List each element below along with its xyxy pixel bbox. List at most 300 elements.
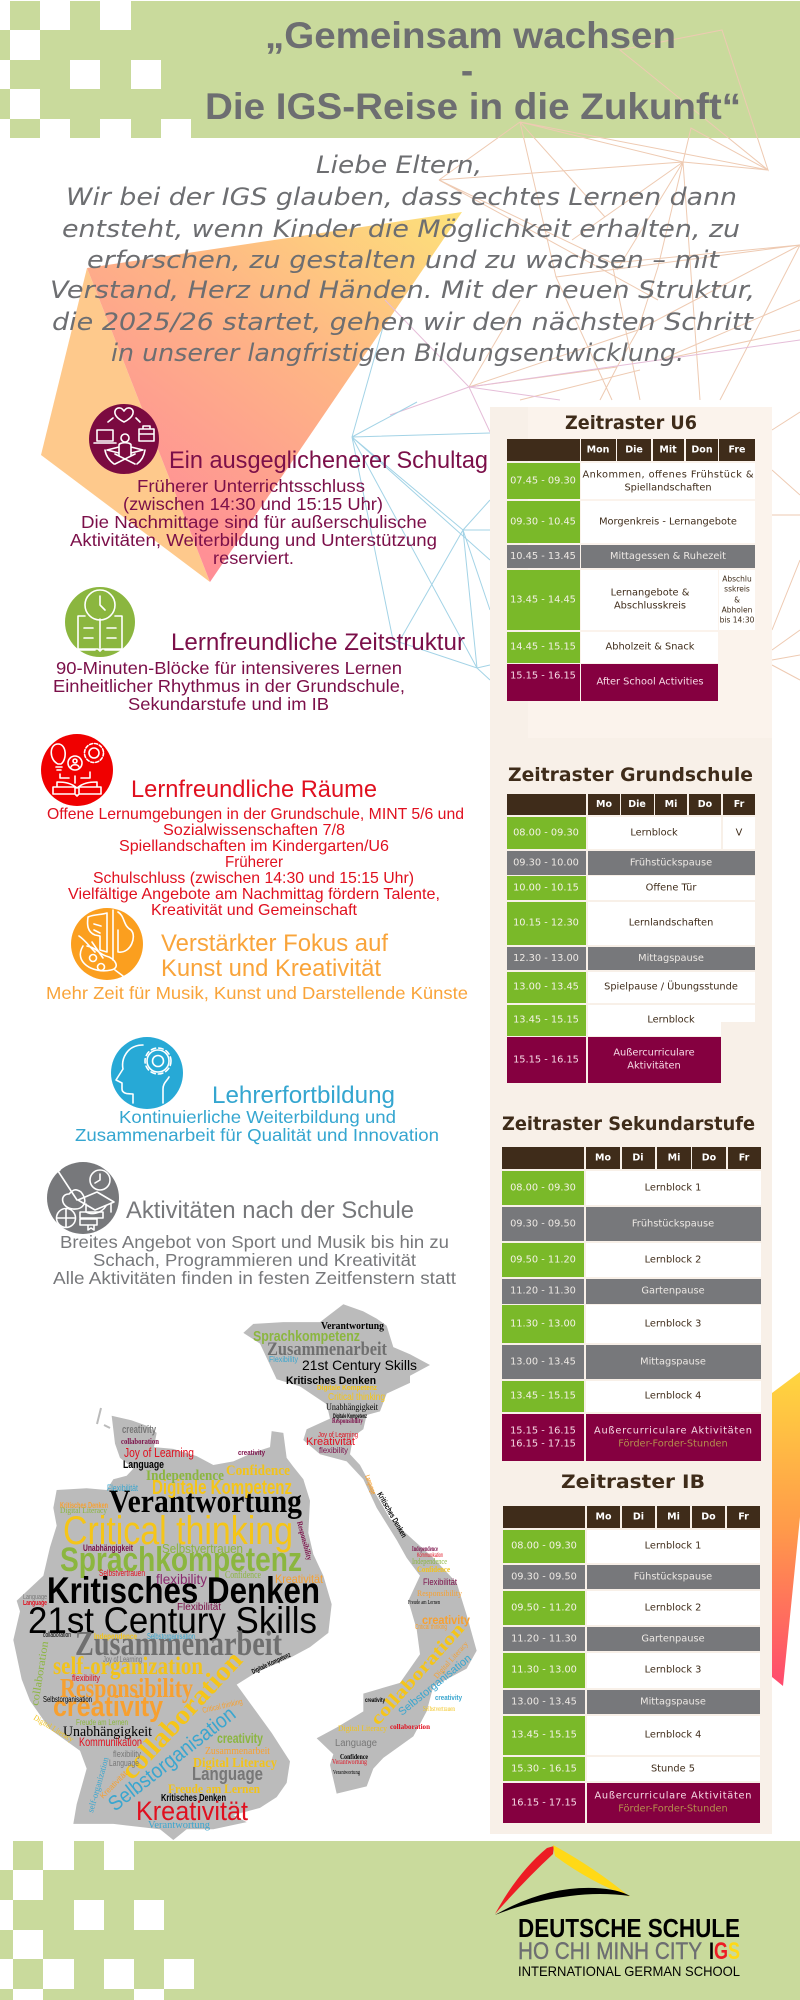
- body text: [53, 658, 405, 714]
- row 15.15: 16.15 - 17.15: [510, 1438, 576, 1450]
- word cloud map: Germany: Responsibility: [295, 1520, 314, 1561]
- row 12.30: Mittagspause: [638, 953, 704, 964]
- body text: Offene Lernumgebungen in der Grundschule, MINT 5/6 und: [47, 806, 464, 823]
- word cloud map: Germany: self-organization: [85, 1756, 111, 1814]
- word cloud map: Vietnam: Zusammenarbeit: [267, 1339, 388, 1360]
- word cloud map: Vietnam: creativity: [435, 1695, 462, 1702]
- word cloud map: Germany: creativity: [217, 1730, 263, 1746]
- header row: Mit: [659, 444, 677, 456]
- word cloud map: Germany: Selbstorganisation: [147, 1632, 195, 1641]
- row 07.45: Spiellandschaften: [624, 482, 712, 494]
- header row: [503, 1506, 760, 1528]
- word cloud map: Vietnam: Flexibilität: [423, 1577, 457, 1587]
- row 13.00: [507, 972, 755, 1003]
- row 15.30: [503, 1757, 760, 1781]
- title: -: [461, 50, 473, 91]
- word cloud map: Germany: Joy of Learning: [124, 1445, 194, 1460]
- row 08.00: Lernblock: [630, 828, 678, 838]
- word cloud map: Vietnam: [243, 1304, 477, 1794]
- row 15.15: [507, 1037, 721, 1083]
- word cloud map: Vietnam: Confidence: [340, 1753, 368, 1761]
- row 09.30: 09.30 - 10.45: [510, 516, 576, 528]
- word cloud map: Germany: Language: [109, 1758, 139, 1768]
- row 13.45: bis 14:30: [720, 616, 755, 624]
- row 13.45: Abschlusskreis: [614, 600, 686, 612]
- word cloud map: Germany: Selbstvertrauen: [99, 1568, 145, 1578]
- row 15.15: Förder-Forder-Stunden: [618, 1438, 728, 1450]
- row 13.45: 13.45 - 15.15: [511, 1730, 577, 1740]
- header row: Die: [625, 444, 643, 456]
- intro letter text: Verstand, Herz und Händen. Mit der neuen Struktur,: [50, 276, 755, 304]
- header row: Fr: [738, 1512, 749, 1522]
- panel: Zeitraster Sekundarstufe: [502, 1113, 761, 1461]
- icon: head with gear: [111, 1037, 183, 1109]
- body text: Schach, Programmieren und Kreativität: [93, 1250, 416, 1270]
- row 11.30: 11.30 - 13.00: [510, 1318, 576, 1330]
- word cloud map: Vietnam: Independence: [412, 1545, 438, 1553]
- row 14.45: 14.45 - 15.15: [510, 642, 576, 652]
- row 15.15: [502, 1414, 761, 1461]
- header row: Di: [633, 1512, 644, 1522]
- word cloud map: Germany: Flexibilität: [177, 1602, 221, 1613]
- word cloud map: Germany: Independence: [146, 1468, 224, 1484]
- heading: [161, 930, 388, 982]
- row 13.45: Abholen: [722, 606, 753, 614]
- row 09.30: Morgenkreis - Lernangebote: [599, 516, 737, 528]
- row 13.00: 13.00 - 13.45: [510, 1356, 576, 1368]
- row 09.50: [503, 1591, 760, 1625]
- row 08.00: Lernblock 1: [645, 1540, 701, 1552]
- row 10.00: 10.00 - 10.15: [513, 882, 579, 894]
- word cloud map: Vietnam: Unabhängigkeit: [326, 1402, 378, 1412]
- word cloud map: Vietnam: flexibility: [319, 1446, 348, 1455]
- word cloud map: Germany: Digital Literacy: [32, 1713, 75, 1744]
- header row: Don: [691, 444, 713, 456]
- row 08.00: [503, 1530, 760, 1563]
- row 11.20: [503, 1627, 760, 1651]
- word cloud map: Germany: Digital Literacy: [60, 1506, 107, 1515]
- row 09.30: 09.30 - 09.50: [510, 1218, 576, 1230]
- row 07.45: Ankommen, offenes Frühstück &: [582, 470, 754, 480]
- row 15.15: 15.15 - 16.15: [510, 670, 576, 682]
- row 08.00: V: [736, 828, 743, 838]
- title: [205, 15, 741, 127]
- word cloud map: Germany: Unabhängigkeit: [63, 1724, 153, 1740]
- row 10.15: 10.15 - 12.30: [513, 918, 579, 928]
- row 13.00: Mittagspause: [640, 1356, 706, 1368]
- row 13.00: [503, 1690, 760, 1714]
- word cloud map: Germany: Language: [23, 1600, 47, 1607]
- row 09.30: [502, 1207, 761, 1241]
- row 13.45: Lernblock 4: [645, 1390, 701, 1402]
- word cloud map: Germany: Responsibility: [60, 1673, 193, 1703]
- header row: Mi: [665, 799, 677, 810]
- word cloud map: Vietnam: Kritisches Denken: [286, 1375, 376, 1387]
- header row: Die: [628, 799, 646, 810]
- row 09.50: 09.50 - 11.20: [510, 1254, 576, 1266]
- word cloud map: Vietnam: Language: [363, 1474, 377, 1496]
- body text: Früherer: [225, 854, 284, 871]
- logo text: DEUTSCHE SCHULE: [518, 1913, 740, 1943]
- body text: Kreativität und Gemeinschaft: [151, 902, 358, 919]
- row 13.45: 13.45 - 15.15: [510, 1390, 576, 1402]
- body text: Mehr Zeit für Musik, Kunst und Darstellende Künste: [46, 983, 468, 1003]
- body text: Sekundarstufe und im IB: [128, 694, 329, 714]
- word cloud map: Germany: Language: [192, 1764, 263, 1784]
- body text: (zwischen 14:30 und 15:15 Uhr): [123, 494, 383, 514]
- word cloud map: Germany: Kritisches Denken: [60, 1501, 108, 1510]
- row 11.30: [503, 1653, 760, 1688]
- heading: Ein ausgeglichenerer Schultag: [169, 447, 488, 474]
- table heading: Zeitraster Sekundarstufe: [502, 1113, 755, 1135]
- word cloud map: Germany: Kreativität: [136, 1796, 248, 1826]
- body text: [47, 806, 464, 919]
- row 13.45: Lernangebote &: [611, 588, 690, 598]
- item: Lernfreundliche Zeitstruktur: [53, 587, 465, 714]
- row 11.30: 11.30 - 13.00: [511, 1664, 577, 1676]
- row 10.45: Mittagessen & Ruhezeit: [610, 551, 726, 562]
- word cloud map: Vietnam: Responsibility: [332, 1417, 363, 1425]
- row 08.00: 08.00 - 09.30: [513, 828, 579, 838]
- row 10.00: [507, 876, 755, 900]
- word cloud map: Germany: Kritisches Denken: [161, 1793, 226, 1804]
- body text: Schulschluss (zwischen 14:30 und 15:15 Uhr): [93, 870, 414, 887]
- header row: Do: [702, 1152, 717, 1164]
- row 09.50: 09.50 - 11.20: [511, 1602, 577, 1614]
- row 09.30: [503, 1565, 760, 1589]
- word cloud map: Germany: collaboration: [43, 1632, 71, 1639]
- row 09.30: Frühstückspause: [630, 858, 712, 868]
- panel: Zeitraster IB: [503, 1471, 760, 1823]
- row 12.30: [507, 947, 755, 970]
- icon: guitar, clock, cap, ball, books: [47, 1162, 119, 1234]
- word cloud map: Germany: Freude am Lernen: [168, 1781, 261, 1796]
- row 15.15: 15.15 - 16.15: [510, 1426, 576, 1436]
- row 15.15: After School Activities: [597, 676, 703, 688]
- title: Die IGS-Reise in die Zukunft“: [205, 86, 741, 127]
- word cloud map: Vietnam: Joy of Learning: [318, 1432, 358, 1439]
- row 13.45: [507, 1005, 755, 1036]
- word cloud map: Germany: Confidence: [225, 1570, 261, 1581]
- word cloud map: Germany: [13, 1408, 332, 1840]
- word cloud map: Germany: creativity: [122, 1424, 157, 1436]
- row 13.45: &: [734, 596, 740, 604]
- header row: Fr: [739, 1152, 750, 1164]
- word cloud map: Vietnam: creativity: [365, 1698, 385, 1704]
- word cloud map: Germany: Verantwortung: [148, 1819, 210, 1831]
- header row: Di: [632, 1152, 644, 1164]
- word cloud map: Germany: Selbstorganisation: [43, 1695, 92, 1704]
- intro letter text: in unserer langfristigen Bildungsentwicklung.: [111, 339, 684, 367]
- row 13.00: Mittagspause: [640, 1696, 706, 1708]
- body text: [75, 1107, 439, 1145]
- icon: balance, heart, laptop, briefcase: [89, 404, 159, 474]
- word cloud map: Germany: creativity: [53, 1691, 163, 1723]
- row 13.45: Lernblock 4: [645, 1730, 701, 1740]
- row 09.50: Lernblock 2: [645, 1254, 701, 1266]
- intro letter text: Liebe Eltern,: [316, 151, 482, 179]
- row 08.00: [502, 1171, 761, 1205]
- word cloud map: Germany: Kreativität: [98, 1769, 130, 1800]
- header row: Do: [698, 799, 713, 810]
- body text: Zusammenarbeit für Qualität und Innovation: [75, 1125, 439, 1145]
- header row: [502, 1147, 761, 1169]
- word cloud map: Germany: Selbstorganisation: [104, 1702, 240, 1816]
- word cloud map: Vietnam: Language: [335, 1738, 377, 1749]
- row 10.45: [507, 545, 755, 568]
- word cloud map: Germany: Digital Literacy: [193, 1756, 277, 1771]
- word cloud map: Vietnam: 21st Century Skills: [302, 1357, 417, 1373]
- word cloud map: Vietnam: collaboration: [390, 1723, 430, 1731]
- header row: Fr: [734, 799, 745, 810]
- intro letter text: erforschen, zu gestalten und zu wachsen – mit: [87, 246, 721, 274]
- row 11.30: Lernblock 3: [645, 1664, 701, 1676]
- header row: Do: [701, 1512, 716, 1522]
- icon: bulb, person, gear, book: [41, 734, 113, 806]
- body text: 90-Minuten-Blöcke für intensiveres Lernen: [56, 658, 402, 678]
- word cloud map: Germany: self-organization: [53, 1653, 203, 1680]
- row 13.45: sskreis: [724, 584, 750, 594]
- row 11.20: [502, 1279, 761, 1304]
- logo text: [518, 1913, 740, 1979]
- item: Lernfreundliche Räume: [41, 734, 464, 919]
- logo text: HO CHI MINH CITY: [518, 1938, 702, 1965]
- table heading: Zeitraster IB: [561, 1471, 705, 1493]
- word cloud map: Vietnam: Verantwortung: [333, 1770, 360, 1776]
- row 09.50: [502, 1243, 761, 1277]
- word cloud map: Germany: Zusammenarbeit: [75, 1624, 282, 1663]
- word cloud map: Germany: Freude am Lernen: [76, 1718, 128, 1727]
- row 13.45: [507, 570, 755, 630]
- word cloud map: Germany: flexibility: [72, 1673, 100, 1683]
- word cloud map: Vietnam: Kommunikation: [417, 1553, 443, 1559]
- word cloud map: Vietnam: Selbstorganisation: [396, 1652, 474, 1718]
- panel: Zeitraster U6: [507, 412, 755, 701]
- header row: Mon: [587, 444, 610, 456]
- word cloud map: Vietnam: Independence: [412, 1557, 447, 1566]
- row 14.45: Abholzeit & Snack: [606, 642, 695, 652]
- bottom banner with checker pattern: [0, 1841, 800, 2000]
- header row: [507, 794, 755, 815]
- body text: Spiellandschaften im Kindergarten/U6: [119, 838, 389, 855]
- word cloud map: Germany: 21st Century Skills: [28, 1600, 317, 1641]
- word cloud map: Vietnam: Confidence: [417, 1565, 450, 1574]
- row 16.15: 16.15 - 17.15: [511, 1798, 577, 1808]
- header row: Mi: [668, 1152, 680, 1164]
- word cloud map: Vietnam: Responsibility: [417, 1589, 462, 1598]
- row 13.45: [502, 1381, 761, 1412]
- word cloud map: Germany: Critical thinking: [201, 1697, 243, 1715]
- word cloud map: Vietnam: Digital Literacy: [338, 1724, 387, 1733]
- heading: Aktivitäten nach der Schule: [126, 1197, 414, 1224]
- header row: Fre: [728, 444, 746, 456]
- word cloud map: Vietnam: Kreativität: [306, 1436, 355, 1448]
- row 15.15: Aktivitäten: [627, 1060, 681, 1072]
- word cloud map: Germany: Kommunikation: [79, 1735, 142, 1749]
- heading: Lernfreundliche Räume: [131, 776, 377, 803]
- word cloud map: Germany: flexibility: [156, 1571, 207, 1587]
- body text: [70, 476, 437, 568]
- row 13.45: Lernblock: [647, 1014, 695, 1026]
- intro letter text: [50, 151, 755, 367]
- row 09.30: 09.30 - 10.00: [513, 858, 579, 868]
- row 09.30: Fühstückspause: [634, 1572, 712, 1582]
- word cloud map: Vietnam: collaboration: [366, 1619, 468, 1729]
- row 11.30: Lernblock 3: [645, 1318, 701, 1330]
- row 10.15: [507, 902, 755, 945]
- word cloud map: Germany: flexibility: [113, 1749, 141, 1759]
- row 15.15: Außercurriculare Aktivitäten: [594, 1426, 752, 1436]
- word cloud map: Vietnam: Verantwortung: [321, 1320, 384, 1332]
- body text: Einheitlicher Rhythmus in der Grundschule,: [53, 676, 405, 696]
- row 12.30: 12.30 - 13.00: [513, 953, 579, 964]
- word cloud map: Vietnam: Freude am Lernen: [408, 1600, 440, 1606]
- row 08.00: Lernblock 1: [645, 1182, 701, 1194]
- table heading: Zeitraster Grundschule: [508, 764, 753, 786]
- word cloud map: Germany: Digitale Kompetenz: [152, 1477, 292, 1499]
- word cloud map: Germany: Zusammenarbeit: [205, 1746, 270, 1757]
- row 16.15: [503, 1783, 760, 1823]
- heading: Lernfreundliche Zeitstruktur: [171, 629, 465, 656]
- panel: Zeitraster Grundschule: [507, 764, 755, 1083]
- header row: Mo: [596, 1512, 612, 1522]
- row 07.45: 07.45 - 09.30: [510, 476, 576, 486]
- word cloud map: Germany: Verantwortung: [109, 1484, 302, 1520]
- heading: Lehrerfortbildung: [212, 1082, 395, 1109]
- title: „Gemeinsam wachsen: [265, 15, 676, 56]
- word cloud map: Vietnam: Digital Literacy: [432, 1639, 470, 1680]
- body text: [53, 1232, 456, 1288]
- word cloud map: Vietnam: Critical thinking: [415, 1624, 447, 1631]
- row 14.45: [507, 632, 718, 663]
- row 11.20: Gartenpause: [641, 1286, 705, 1296]
- logo text: INTERNATIONAL GERMAN SCHOOL: [518, 1963, 740, 1979]
- decorative network lines: peach: [439, 30, 800, 680]
- word cloud map: Vietnam: Digitale Kompetenz: [333, 1414, 367, 1420]
- word cloud map: Vietnam: Verantwortung: [332, 1758, 367, 1766]
- row 13.45: 13.45 - 15.15: [513, 1014, 579, 1026]
- body text: Vielfältige Angebote am Nachmittag fördern Talente,: [68, 886, 440, 903]
- word cloud map: Germany: Confidence: [226, 1463, 290, 1479]
- word cloud map: Germany: Critical thinking: [63, 1509, 293, 1553]
- word cloud map: Germany: collaboration: [29, 1640, 51, 1706]
- heading: Verstärkter Fokus auf: [161, 930, 388, 957]
- decorative gradient polygon at right edge: [772, 1372, 800, 1686]
- intro letter text: Wir bei der IGS glauben, dass echtes Lernen dann: [66, 183, 737, 211]
- word cloud map: Germany: Unabhängigkeit: [83, 1543, 133, 1553]
- body text: Breites Angebot von Sport und Musik bis hin zu: [60, 1232, 449, 1252]
- word cloud map: Germany: Kreativität: [275, 1572, 324, 1586]
- top banner with checker pattern: [0, 0, 800, 138]
- item: Aktivitäten nach der Schule: [47, 1162, 456, 1288]
- word cloud map: Vietnam: creativity: [422, 1613, 470, 1627]
- word cloud map: Germany: Language: [123, 1459, 164, 1471]
- word cloud map: Germany: Language: [23, 1594, 47, 1601]
- row 13.00: 13.00 - 13.45: [513, 982, 579, 992]
- heading: Kunst und Kreativität: [161, 955, 381, 982]
- item: Ein ausgeglichenerer Schultag: [70, 404, 488, 568]
- word cloud map: Germany: Digitale Kompetenz: [251, 1652, 292, 1676]
- table heading: Zeitraster U6: [565, 412, 697, 434]
- row 11.20: 11.20 - 11.30: [511, 1634, 577, 1644]
- row 11.20: Gartenpause: [641, 1634, 705, 1644]
- word cloud map: Germany: Selbstvertrauen: [162, 1541, 243, 1556]
- body text: Alle Aktivitäten finden in festen Zeitfenstern statt: [53, 1268, 456, 1288]
- word cloud map: Germany: Flexibilität: [107, 1483, 138, 1493]
- word cloud map: Germany: collaboration: [114, 1645, 248, 1785]
- row 09.50: Lernblock 2: [645, 1602, 701, 1614]
- row 15.15: 15.15 - 16.15: [513, 1054, 579, 1066]
- word cloud map: Germany: creativity: [238, 1450, 265, 1457]
- row 07.45: [507, 463, 755, 499]
- word cloud map: Vietnam: Flexibility: [269, 1355, 298, 1364]
- row 10.00: Offene Tür: [646, 882, 697, 894]
- row 09.30: 09.30 - 09.50: [511, 1572, 577, 1582]
- row 09.30: [507, 851, 755, 875]
- row 15.30: Stunde 5: [651, 1764, 695, 1774]
- row 08.00: 08.00 - 09.30: [511, 1540, 577, 1552]
- panel: timetable background: [490, 407, 772, 1834]
- header row: Mo: [595, 1152, 611, 1164]
- word cloud map: Germany: Joy of Learning: [103, 1655, 142, 1664]
- row 15.15: Außercurriculare: [613, 1048, 695, 1058]
- word cloud map: Germany: Kritisches Denken: [47, 1570, 320, 1611]
- decorative network lines: blue: [352, 320, 490, 680]
- body text: Die Nachmittage sind für außerschulische: [81, 512, 427, 532]
- row 13.00: Spielpause / Übungsstunde: [604, 980, 738, 992]
- header row: Mi: [667, 1512, 680, 1522]
- row 08.00: [507, 817, 755, 849]
- header row: [507, 439, 755, 461]
- row 13.45: [503, 1716, 760, 1755]
- header row: Mo: [596, 799, 612, 810]
- body text: Sozialwissenschaften 7/8: [163, 822, 345, 839]
- row 11.30: [502, 1305, 761, 1343]
- row 13.00: 13.00 - 13.45: [511, 1696, 577, 1708]
- icon: masks and palette: [71, 908, 143, 980]
- decorative gradient polygon behind intro: [41, 212, 462, 582]
- row 16.15: Außercurriculare Aktivitäten: [594, 1790, 752, 1802]
- word cloud map: Vietnam: Sprachkompetenz: [253, 1328, 360, 1345]
- word cloud map: Vietnam: Selbstvertrauen: [423, 1705, 455, 1713]
- word cloud map: Vietnam: Kritisches Denken: [375, 1490, 409, 1539]
- row 10.15: Lernlandschaften: [629, 918, 713, 928]
- row 09.30: [507, 501, 755, 543]
- word cloud map: Vietnam: Critical thinking: [328, 1392, 385, 1403]
- row 10.45: 10.45 - 13.45: [510, 551, 576, 562]
- logo: Deutsche Schule Ho Chi Minh City IGS: [495, 1845, 740, 1979]
- intro letter text: die 2025/26 startet, gehen wir den nächsten Schritt: [52, 308, 755, 336]
- row 13.45: Abschlu: [722, 574, 752, 584]
- logo mark: brush triangle: [495, 1845, 630, 1915]
- word cloud map: Vietnam: Digitale Kompetenz: [317, 1385, 377, 1392]
- logo text: IGS: [709, 1938, 740, 1965]
- decorative network lines: pink: [385, 300, 800, 432]
- body text: Früherer Unterrichtsschluss: [137, 476, 365, 496]
- word cloud map: Germany: Sprachkompetenz: [60, 1541, 302, 1579]
- item: Lehrerfortbildung: [75, 1037, 439, 1145]
- body text: reserviert.: [213, 548, 294, 568]
- icon: book and clock: [65, 587, 135, 657]
- body text: Kontinuierliche Weiterbildung und: [119, 1107, 396, 1127]
- row 09.30: Frühstückspause: [632, 1218, 714, 1230]
- row 13.00: [502, 1345, 761, 1379]
- row 13.45: 13.45 - 14.45: [510, 594, 576, 606]
- row 15.15: [507, 664, 718, 701]
- row 15.30: 15.30 - 16.15: [511, 1764, 577, 1774]
- item: Kunst und Kreativität: [46, 908, 468, 1003]
- word cloud map: Germany: Independence: [94, 1632, 137, 1641]
